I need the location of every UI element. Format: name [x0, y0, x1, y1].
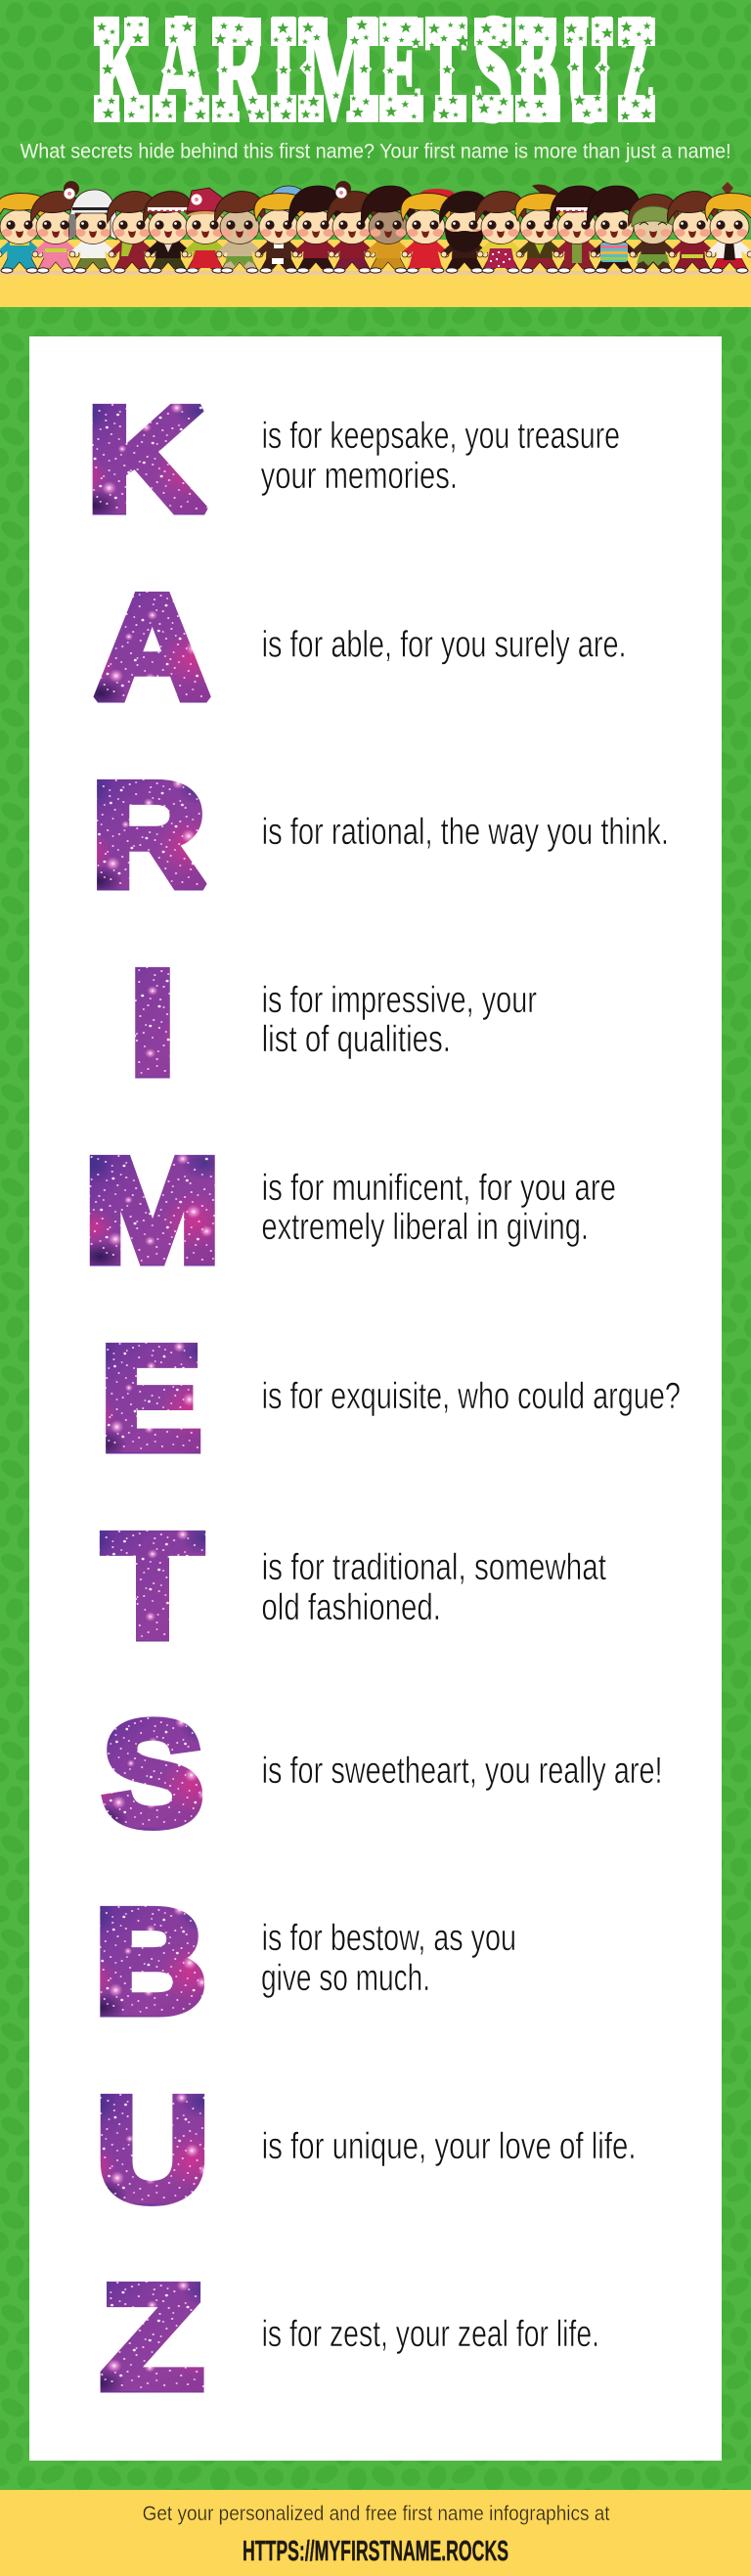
- letter S: S: [102, 1690, 204, 1857]
- text: T meaning: old fashioned.: [261, 1587, 441, 1628]
- icon: character 6: [182, 188, 229, 273]
- text: B meaning: is for bestow, as you: [262, 1918, 516, 1959]
- footer panel: [0, 2490, 751, 2576]
- text: B meaning: give so much.: [261, 1958, 430, 1999]
- row R: [91, 752, 669, 918]
- icon: character 16: [550, 186, 603, 273]
- letter T: T: [103, 1502, 202, 1668]
- row S: [102, 1690, 663, 1857]
- text: U meaning: is for unique, your love of life.: [262, 2126, 637, 2167]
- text: Z meaning: is for zest, your zeal for life.: [262, 2314, 599, 2355]
- parade of cartoon characters: [0, 181, 751, 273]
- footer url: HTTPS://MYFIRSTNAME.ROCKS: [243, 2536, 508, 2567]
- row M: [83, 1129, 616, 1294]
- letter I: I: [129, 940, 176, 1105]
- letter M: M: [83, 1129, 221, 1294]
- text: M meaning: extremely liberal in giving.: [261, 1207, 589, 1248]
- icon: character 9: [288, 186, 342, 273]
- icon: character 4: [107, 192, 157, 273]
- row A: [94, 563, 627, 731]
- icon: character 20: [705, 182, 751, 273]
- letter U: U: [96, 2066, 209, 2233]
- icon: character 19: [667, 192, 718, 273]
- letter B: B: [94, 1879, 207, 2045]
- text: I meaning: [262, 980, 537, 1060]
- letter Z: Z: [101, 2253, 203, 2421]
- text: K meaning: your memories.: [261, 456, 458, 497]
- text: M meaning: is for munificent, for you are: [262, 1168, 616, 1209]
- letter R: R: [91, 752, 206, 918]
- icon: character 1: [0, 194, 48, 273]
- text: M meaning: [261, 1168, 616, 1248]
- icon: character 5: [143, 192, 194, 273]
- text: K meaning: [261, 416, 620, 497]
- text: B meaning: [261, 1918, 516, 1999]
- letter E: E: [100, 1314, 202, 1482]
- icon: character 14: [475, 192, 526, 273]
- row I: [129, 940, 537, 1105]
- text: T meaning: [261, 1547, 606, 1628]
- icon: character 15: [515, 184, 567, 273]
- text: K meaning: is for keepsake, you treasure: [262, 416, 620, 457]
- ground stripe: [0, 271, 751, 275]
- icon: character 18: [628, 195, 679, 273]
- row T: [103, 1502, 606, 1668]
- icon: character 3: [69, 190, 117, 273]
- icon: character 8: [254, 194, 307, 273]
- text: T meaning: is for traditional, somewhat: [262, 1547, 606, 1588]
- row E: [100, 1314, 681, 1482]
- icon: character 13: [439, 192, 490, 273]
- row U: [96, 2066, 637, 2233]
- row B: [94, 1879, 516, 2045]
- icon: character 11: [361, 186, 415, 273]
- yellow band: [0, 240, 751, 307]
- icon: character 7: [214, 192, 265, 273]
- row K: [86, 377, 620, 543]
- text: I meaning: list of qualities.: [262, 1019, 451, 1060]
- icon: character 2: [30, 181, 81, 273]
- icon: character 12: [401, 189, 455, 273]
- row Z: [101, 2253, 599, 2421]
- panel: white content card: [29, 336, 722, 2461]
- text: A meaning: is for able, for you surely are.: [262, 624, 627, 665]
- letter A: A: [94, 563, 211, 731]
- icon: character 10: [327, 181, 377, 273]
- footer text: Get your personalized and free first name infographics at: [143, 2503, 610, 2525]
- icon: character 17: [587, 186, 641, 273]
- title: [94, 0, 655, 154]
- icon: blue hat behind: [269, 186, 308, 217]
- text: I meaning: is for impressive, your: [262, 980, 537, 1021]
- letter K: K: [86, 377, 206, 543]
